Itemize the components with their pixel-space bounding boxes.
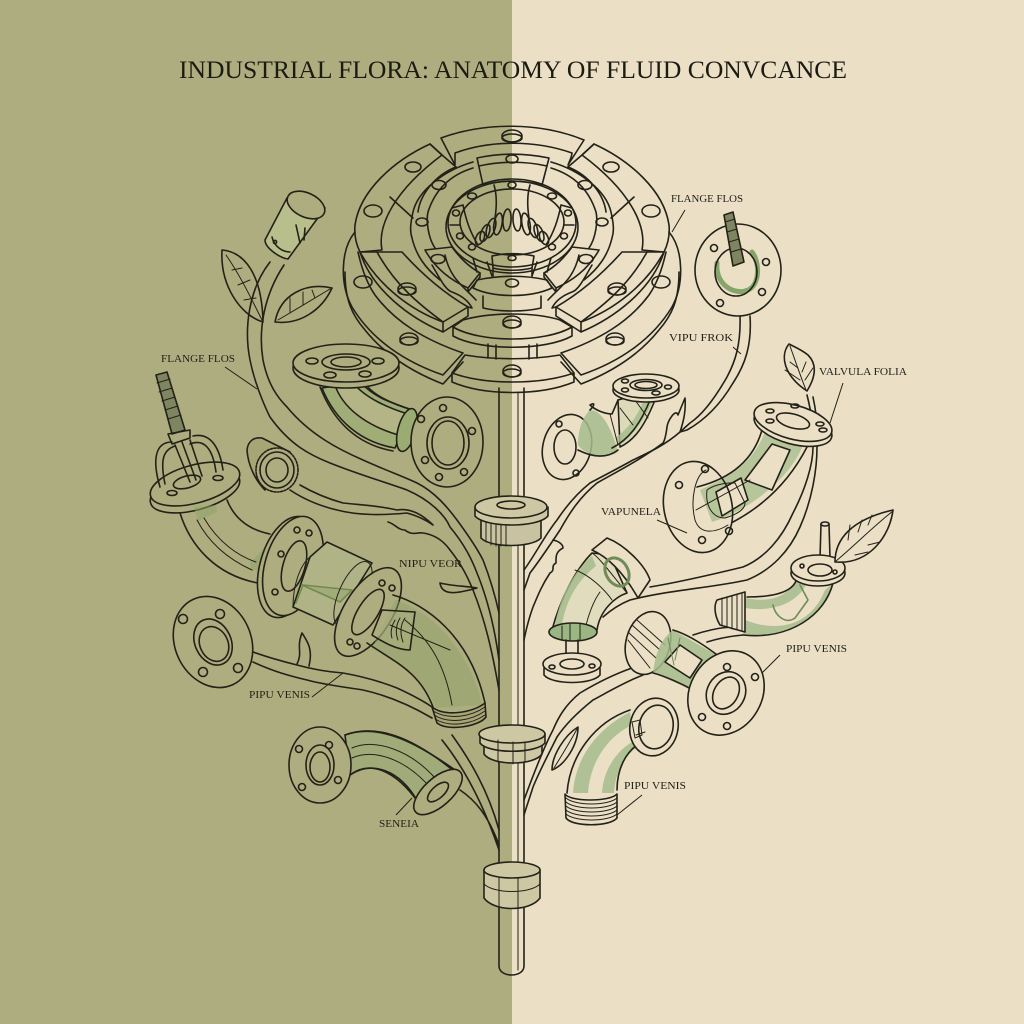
valve and elbow assembly, left — [146, 344, 486, 822]
label: pipu venis right — [762, 643, 847, 673]
pipes and fittings, right — [535, 212, 893, 825]
R4 flange — [791, 522, 845, 586]
mid ring arc — [411, 162, 473, 280]
flower head: flange petals — [343, 126, 681, 393]
upper elbow top flange — [293, 344, 399, 388]
vine: lower right inner — [524, 675, 643, 815]
ring flange — [159, 583, 267, 701]
label: vipu frok: VIPU FROK — [669, 332, 733, 344]
top mid segment — [477, 154, 549, 185]
elbow R2 — [696, 430, 807, 522]
mid front petal — [473, 276, 552, 296]
small ring fitting — [247, 438, 298, 492]
transparent cylinder — [293, 542, 380, 632]
label: valvula folia: VALVULA FOLIA — [819, 366, 907, 378]
R5 flange — [673, 637, 779, 749]
label: vapunela — [601, 506, 687, 533]
title: INDUSTRIAL FLORA: ANATOMY OF FLUID CONVCANCE — [179, 57, 847, 84]
label: seneia: SENEIA — [379, 818, 419, 830]
background: right cream half — [512, 0, 1024, 1024]
inner petal — [425, 247, 480, 288]
label: flange flos left: FLANGE FLOS — [161, 353, 235, 365]
label: pipu venis left — [249, 673, 343, 701]
label: pipu venis left: PIPU VENIS — [249, 689, 310, 701]
vine: ring flange branch lower — [253, 662, 432, 718]
label: vapunela: VAPUNELA — [601, 506, 661, 518]
right flange of upper elbow — [411, 397, 483, 487]
vine: top right inner — [524, 316, 740, 570]
inner throat teeth — [473, 209, 551, 246]
label: pipu venis lower right — [617, 780, 686, 815]
sprout — [297, 633, 310, 666]
lower left elbow — [289, 727, 470, 822]
elbow R6 — [565, 694, 684, 825]
inner ring outer — [448, 179, 576, 267]
collar: upper — [475, 496, 548, 546]
label: pipu venis right: PIPU VENIS — [786, 643, 847, 655]
neck column — [483, 296, 541, 311]
valve elbow pipe — [180, 500, 270, 583]
R1 top flange — [613, 374, 679, 402]
threaded valve stem — [156, 372, 185, 434]
upper outer petal — [355, 144, 442, 252]
valve yoke — [156, 430, 223, 487]
vine: valve leaf branch — [650, 395, 813, 587]
bolt lower — [400, 333, 418, 345]
vine: lower left — [442, 735, 499, 850]
valve flange — [146, 454, 244, 521]
top outer segment — [441, 126, 584, 165]
large lower petal — [360, 252, 468, 322]
label: flange flos right — [671, 193, 743, 232]
main stem — [475, 388, 548, 975]
threaded end — [432, 703, 486, 727]
vines and branches — [247, 262, 817, 850]
top right flange with bolt — [695, 212, 781, 316]
elbow R5 — [618, 606, 720, 690]
inner ring segments — [450, 185, 496, 245]
vine: pipe link right — [693, 627, 743, 642]
leaf right — [835, 510, 893, 562]
label: flange flos right: FLANGE FLOS — [671, 193, 743, 205]
leaf valvula — [784, 344, 814, 391]
inner front block — [492, 254, 534, 270]
elbow R4 — [715, 577, 833, 636]
vine: top right — [524, 316, 750, 590]
labels and leader lines — [161, 193, 907, 830]
inner top bolt — [508, 182, 516, 188]
vine: small ring branch — [290, 485, 433, 525]
vine: upper left inner line — [261, 265, 499, 613]
vine: upper left to cup — [247, 262, 499, 660]
base front petal — [452, 355, 574, 382]
background: left olive half — [0, 0, 512, 1024]
elbow R1 — [535, 390, 655, 485]
half flower (left) — [343, 144, 496, 384]
leaf fragment — [440, 583, 477, 593]
vine: small ring branch lower — [388, 522, 499, 690]
vine: lower right — [524, 668, 632, 800]
stem pipe — [499, 388, 524, 975]
lower front petal — [453, 314, 572, 339]
collar: middle — [479, 725, 545, 764]
collar: lower — [484, 862, 540, 908]
half flower (mirrored right) — [528, 144, 681, 384]
vine: ring flange branch — [253, 652, 432, 707]
R3 small flange — [543, 640, 601, 682]
bolts upper — [405, 162, 421, 172]
label: valvula folia — [819, 366, 907, 423]
mid flange left — [247, 509, 334, 625]
top outer bolt — [502, 130, 522, 142]
mid ring bolts — [432, 180, 446, 190]
cup valve — [265, 186, 329, 259]
leaf upper right — [275, 287, 332, 322]
label: flange flos left — [161, 353, 257, 389]
bolt left — [354, 276, 372, 288]
neck bars — [488, 344, 537, 359]
small leaf lower right — [552, 727, 578, 770]
inner ring inner — [460, 189, 564, 255]
stem highlight line — [517, 392, 519, 970]
flange right of cylinder — [321, 557, 415, 667]
label: seneia — [379, 798, 419, 830]
label: pipu venis lower right: PIPU VENIS — [624, 780, 686, 792]
large elbow — [367, 595, 485, 708]
bottom plate — [343, 232, 463, 375]
R2 flange left — [655, 455, 741, 559]
label: nipu veor: NIPU VEOR — [399, 558, 463, 570]
upper elbow pipe — [320, 380, 421, 454]
leaf upper left — [222, 250, 263, 322]
vine: valve leaf branch lower — [603, 397, 817, 617]
label: vipu frok — [669, 332, 741, 354]
cup top-left and leaves — [222, 186, 332, 322]
vine jagged edge — [524, 540, 563, 640]
R2 top flange — [750, 395, 836, 454]
elbow R3 — [549, 538, 650, 641]
